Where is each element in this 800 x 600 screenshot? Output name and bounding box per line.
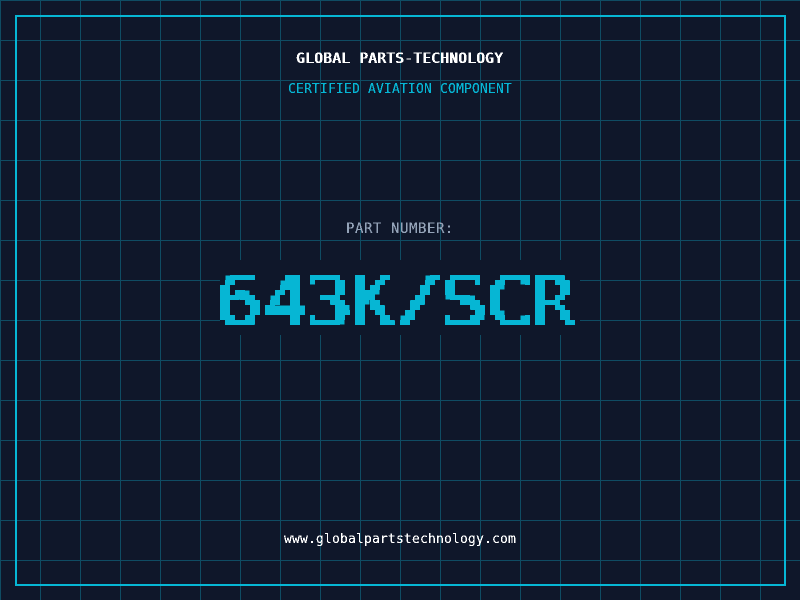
part number value: 6 (215, 262, 262, 342)
part number value: R (532, 262, 574, 342)
part number value: / (396, 264, 444, 334)
part number value: 4 (264, 262, 308, 342)
part number value: C (485, 262, 532, 342)
website address: www.globalpartstechnology.com (284, 532, 516, 547)
certification subheading: CERTIFIED AVIATION COMPONENT (288, 82, 512, 97)
part number value: S (440, 262, 488, 342)
part number value: K (352, 262, 394, 342)
part number value: 3 (305, 262, 352, 342)
part number label: PART NUMBER: (346, 221, 454, 237)
company name heading: GLOBAL PARTS-TECHNOLOGY (296, 51, 503, 67)
part number backing panel (220, 260, 580, 335)
